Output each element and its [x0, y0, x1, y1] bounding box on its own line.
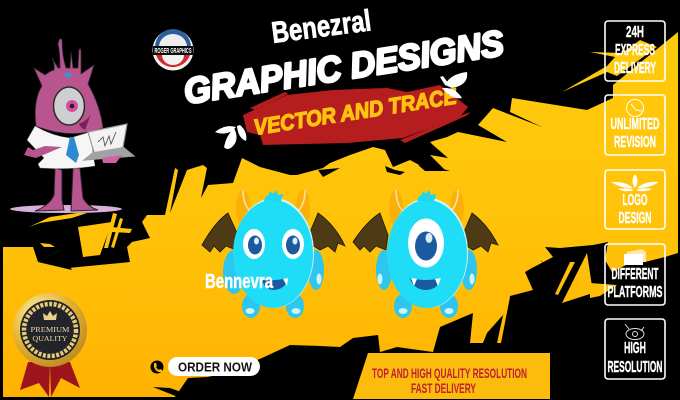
premium quality medal: QUALITY — [32, 334, 68, 343]
quality statement banner: FAST DELIVERY — [411, 380, 476, 396]
hair tuft — [264, 190, 283, 201]
feature box: express delivery — [605, 21, 665, 81]
big eye — [54, 87, 84, 125]
main title: GRAPHIC DESIGNS — [181, 22, 506, 112]
horns — [389, 190, 464, 226]
body — [388, 198, 468, 308]
monster legs — [35, 168, 98, 211]
icon: clock — [626, 100, 644, 116]
feature box: logo design: DESIGN — [618, 210, 652, 227]
feature box: express delivery: 24H — [626, 24, 644, 41]
black corner streak — [153, 387, 195, 397]
ground shadow — [10, 205, 122, 213]
red ribbon — [20, 362, 80, 397]
feet — [394, 294, 412, 318]
blue tie — [66, 137, 79, 163]
feature box: logo design — [605, 170, 665, 229]
body — [234, 198, 314, 308]
feature box: high resolution — [605, 319, 665, 379]
wings — [202, 213, 345, 252]
feature box: different platforms — [605, 244, 665, 305]
icon: eye — [625, 324, 644, 340]
eyes — [243, 229, 265, 259]
mouth — [410, 278, 441, 290]
hand — [102, 155, 122, 163]
dark centre — [20, 300, 80, 360]
black ink blots on the splash — [38, 165, 560, 272]
wings — [353, 213, 498, 252]
pointing arm — [24, 146, 62, 158]
feature box: unlimited revision — [605, 95, 665, 155]
mouth — [79, 114, 91, 130]
arms — [376, 250, 392, 290]
laptop — [84, 124, 134, 160]
icon: folder — [624, 249, 646, 265]
horns — [236, 190, 310, 226]
feature box: high resolution: HIGH — [624, 340, 646, 357]
blue one-eyed monster — [353, 190, 498, 318]
badge name: ROGER GRAPHICS — [154, 46, 192, 55]
watermark name: Bennevra — [205, 271, 274, 293]
forehead spot — [64, 73, 72, 77]
hair tuft — [417, 190, 436, 201]
round company badge — [152, 29, 194, 70]
crown — [43, 311, 57, 320]
brand name heading: Benezral — [270, 4, 373, 50]
feature box: logo design: LOGO — [622, 192, 648, 209]
premium quality medal — [13, 293, 87, 397]
gold ring — [13, 293, 87, 367]
laurel wreath — [24, 304, 76, 356]
single eye — [408, 218, 444, 268]
mascot: pink one-eyed monster with laptop — [10, 39, 134, 213]
red brush stroke banner — [243, 85, 470, 145]
monster head and tendrils — [34, 39, 103, 134]
feet — [242, 294, 260, 318]
white splash droplets right — [440, 72, 467, 98]
white splash droplets left — [215, 125, 246, 149]
quality statement banner: TOP AND HIGH QUALITY RESOLUTION — [372, 365, 527, 381]
blue two-eyed monster — [202, 190, 345, 318]
medal text: PREMIUM — [30, 325, 70, 334]
phone icon — [150, 360, 164, 374]
iris — [66, 100, 78, 112]
quality statement banner — [353, 353, 550, 399]
subtitle: VECTOR AND TRACE — [252, 83, 459, 140]
icon: lotus — [611, 174, 659, 191]
white shirt — [27, 126, 95, 169]
order now button: ORDER NOW — [178, 360, 253, 374]
arms — [223, 250, 245, 294]
mouth — [262, 278, 288, 290]
